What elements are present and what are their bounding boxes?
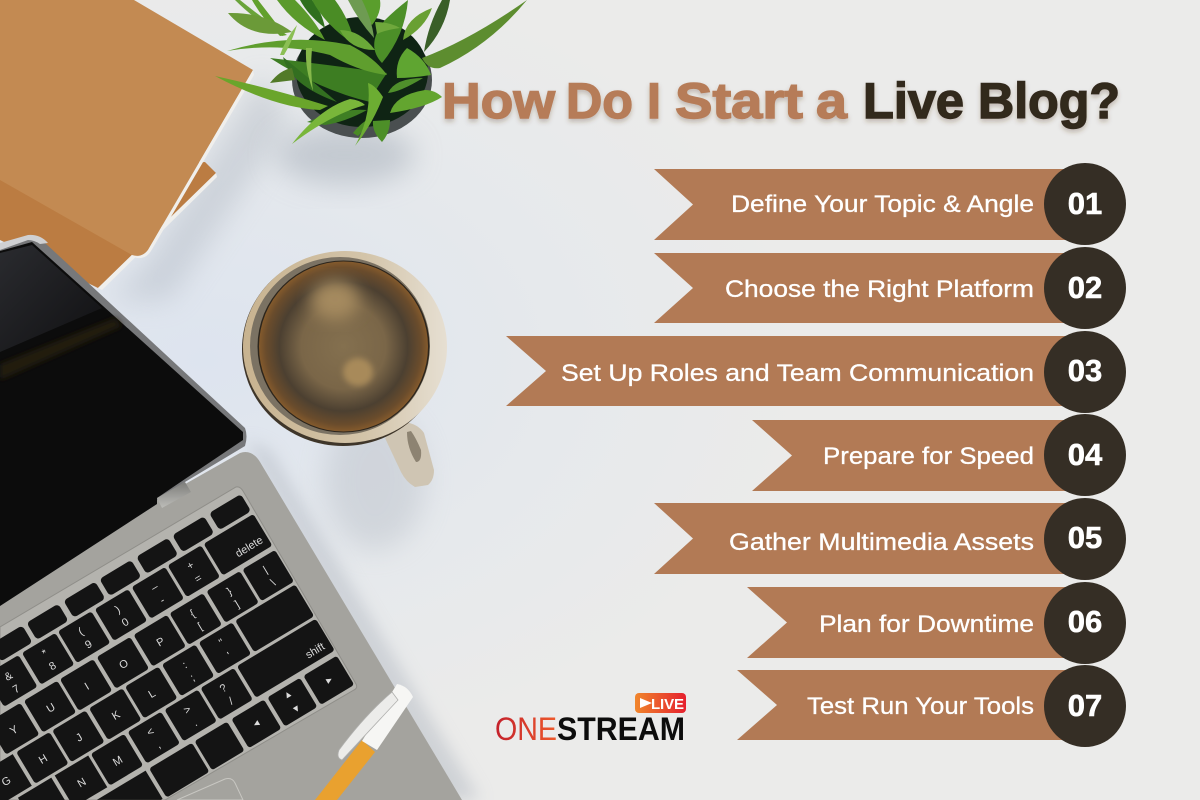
keyboard keys: \ [269,577,278,589]
step 01: 01 [1068,186,1102,221]
step 03: 03 [1068,353,1102,388]
keyboard well [0,487,357,800]
title: How [442,73,555,129]
keyboard keys: ( [76,626,86,638]
keyboard keys: delete [233,534,265,560]
keyboard keys: ? [218,682,229,695]
keyboard keys [0,494,354,800]
step 03: Set Up Roles and Team Communication [561,360,1034,387]
hinge [157,482,191,508]
photo: potted plant [215,0,527,185]
keyboard keys: shift [304,641,327,661]
step 02: Choose the Right Platform [725,276,1034,303]
keyboard keys: N [76,776,89,790]
step 05: Gather Multimedia Assets [729,529,1034,556]
laptop base [0,452,462,800]
keyboard keys: . [191,717,200,729]
keyboard keys: ) [113,604,123,616]
keyboard keys: > [182,704,193,717]
keyboard keys: L [147,687,158,701]
keyboard keys: 9 [83,638,94,652]
photo: laptop [0,235,480,800]
keyboard keys: J [74,731,85,745]
keyboard keys: ▴ [282,688,294,701]
photo: notebooks [0,0,290,300]
keyboard keys: K [110,708,123,723]
keyboard keys: ; [188,672,197,684]
keyboard keys: + [185,559,197,573]
photo: coffee cup [242,251,447,550]
keyboard keys: / [227,695,237,707]
keyboard keys: ] [233,599,242,611]
keyboard keys: | [261,564,270,576]
title: I [647,73,661,129]
step 05 [654,498,1126,580]
step 07: 07 [1068,688,1102,723]
title: Do [566,73,633,129]
keyboard keys: < [145,726,157,739]
keyboard keys: } [225,586,234,598]
photo: pen [315,684,413,800]
title: Live [863,73,964,129]
step 01: Define Your Topic & Angle [731,191,1034,218]
keyboard keys: 0 [120,616,131,629]
keyboard keys: U [45,701,58,716]
keyboard keys: – [149,581,161,594]
title: Blog? [978,73,1120,129]
step 02 [654,247,1126,329]
keyboard keys: : [181,659,189,671]
step 01 [654,163,1126,245]
step 03 [506,331,1126,413]
title: a [816,73,848,129]
keyboard keys: - [158,594,167,607]
keyboard keys: * [40,647,51,660]
keyboard keys: 8 [47,660,58,673]
keyboard keys: " [217,637,227,649]
keyboard keys: & [2,669,16,684]
step 06: 06 [1068,604,1102,639]
keyboard keys: ▾ [291,702,302,716]
step 07: Test Run Your Tools [807,693,1034,720]
laptop screen [0,235,246,606]
step 02: 02 [1068,270,1102,305]
step 04: Prepare for Speed [823,443,1034,470]
step 04 [752,414,1126,496]
keyboard keys: { [188,608,198,620]
keyboard keys: 7 [11,683,22,696]
keyboard keys: G [0,774,13,789]
title [442,73,1120,129]
keyboard keys: ▸ [324,673,335,687]
keyboard keys: Y [8,723,21,738]
keyboard keys: , [154,739,163,751]
keyboard keys: M [111,754,125,769]
OneStream Live logo: STREAM [557,711,685,747]
keyboard keys: H [37,752,50,767]
step 07 [737,665,1126,747]
trackpad [177,778,243,800]
step 06: Plan for Downtime [819,611,1034,638]
title: Start [675,73,803,129]
OneStream Live logo: ONE [495,711,557,747]
step 06 [747,582,1126,664]
keyboard keys: ◂ [251,717,262,730]
keyboard keys: P [155,635,167,649]
keyboard keys: = [193,572,204,586]
step 04: 04 [1068,437,1103,472]
keyboard keys: [ [196,621,205,633]
step 05: 05 [1068,520,1102,555]
OneStream Live logo [495,693,686,747]
keyboard keys: I [83,681,91,693]
keyboard keys: ' [226,650,234,662]
keyboard keys: O [117,657,131,672]
OneStream Live logo: LIVE [651,696,684,713]
